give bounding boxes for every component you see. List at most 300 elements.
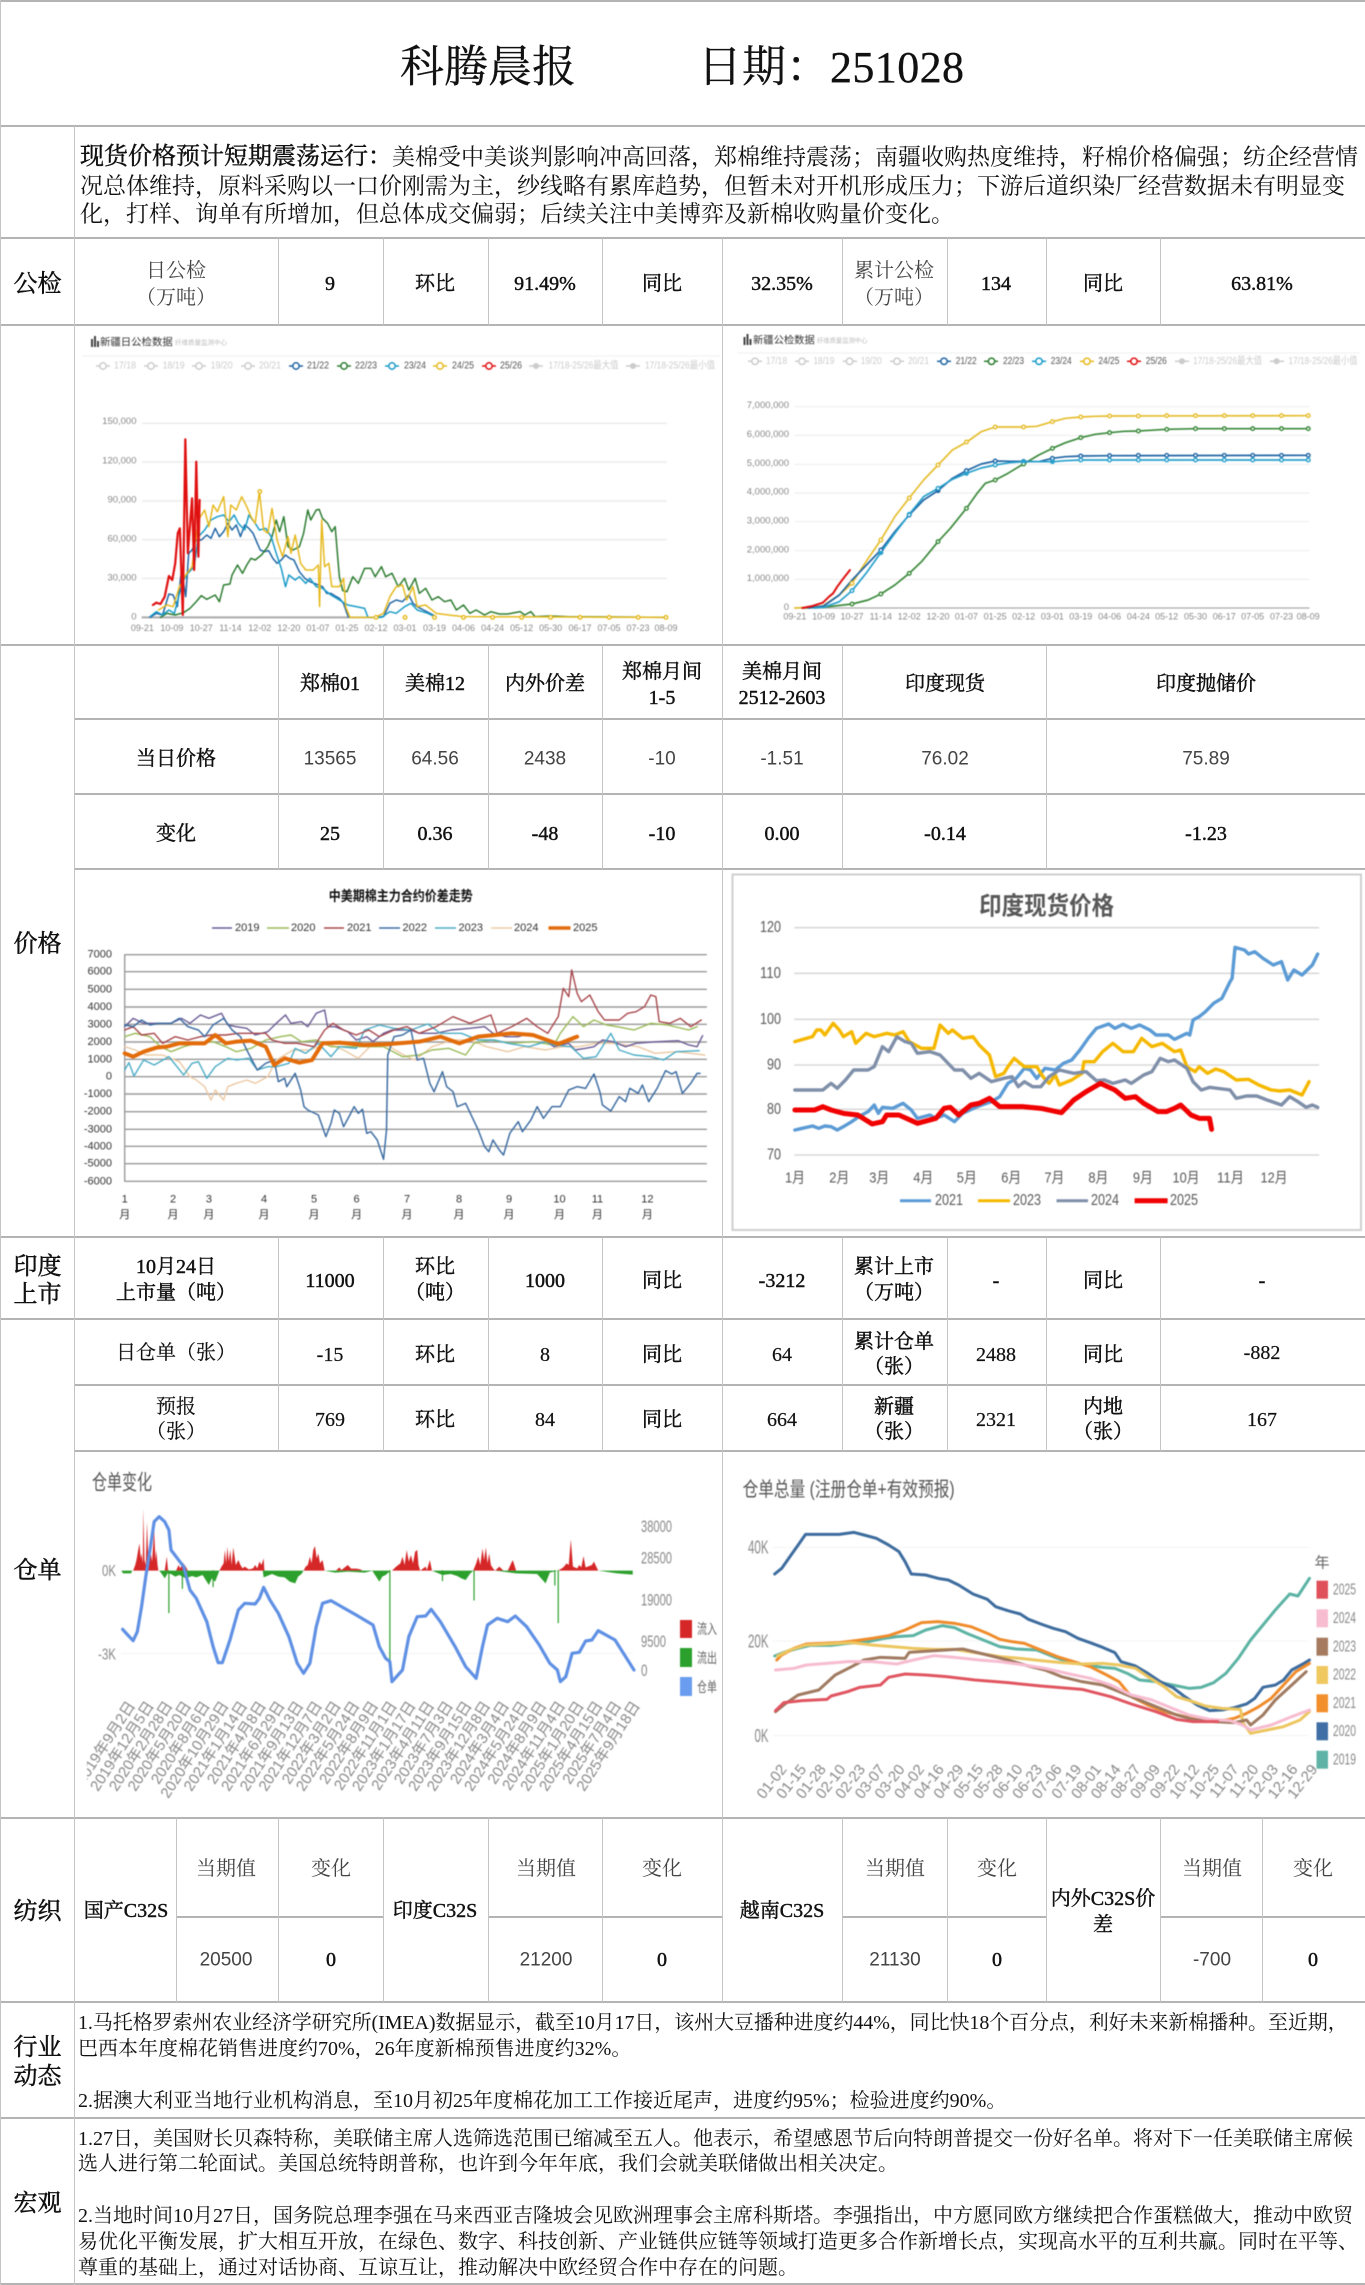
- chart 4 axes: 70: [767, 1146, 781, 1164]
- chart 4 axes: 2月: [829, 1170, 849, 1186]
- chart 4 legend: 2021: [935, 1192, 963, 1209]
- chart 5 date labels: 2024年3月4日: [447, 1698, 513, 1787]
- chart 3 axes: -6000: [84, 1175, 112, 1187]
- chart 6 axes: 20K: [748, 1632, 768, 1652]
- chart 2 axes: 12-20: [926, 611, 950, 621]
- chart 3 axes: 7000: [88, 949, 112, 961]
- chart 5 date labels: 2025年4月15日: [536, 1698, 607, 1794]
- table: prices: 25: [320, 823, 340, 845]
- table: India arrivals: 同比: [642, 1269, 682, 1292]
- chart 3 legend: 2025: [573, 922, 597, 934]
- chart 1 axes: [102, 416, 678, 633]
- table: public inspection: [136, 259, 1293, 309]
- chart 6 axes: 03-20: [871, 1761, 908, 1802]
- chart 1 axes: 11-14: [219, 623, 242, 633]
- chart 6 axes: 09-09: [1127, 1761, 1164, 1802]
- chart 3 axes: 2000: [88, 1036, 112, 1048]
- table: warehouse receipts: 新疆: [874, 1395, 914, 1418]
- chart 2 lines: [795, 407, 1309, 608]
- table: warehouse receipts: （张）: [864, 1355, 924, 1378]
- chart 2 axes: 4,000,000: [747, 486, 789, 498]
- table: prices: 64.56: [411, 748, 459, 770]
- chart 2 axes: 07-05: [1241, 611, 1264, 621]
- chart 2 axes: 08-09: [1297, 611, 1320, 621]
- chart 3 axes: 5: [311, 1193, 317, 1205]
- chart 4 axes: 9月: [1133, 1170, 1153, 1186]
- title: [400, 42, 964, 92]
- chart 3 axes: [84, 949, 654, 1221]
- chart 5 date labels: 2023年4月11日: [368, 1698, 438, 1793]
- chart 6 axes: 08-27: [1107, 1761, 1144, 1802]
- chart 5 date labels: 2020年5月20日: [125, 1698, 195, 1794]
- chart: total warehouse receipts: [743, 1478, 1356, 1802]
- chart 6 axes: 05-15: [950, 1761, 987, 1802]
- chart 1 legend: 22/23: [355, 360, 377, 372]
- table: yarn prices: 越南C32S: [740, 1899, 824, 1922]
- chart 5 date labels: 2021年12月7日: [255, 1698, 326, 1794]
- section labels: 纺织: [14, 1898, 62, 1925]
- chart 2 legend: 21/22: [956, 356, 977, 367]
- chart 3 legend: 2021: [347, 922, 371, 934]
- chart 2 title: [744, 334, 868, 346]
- table: warehouse receipts: 664: [767, 1409, 797, 1431]
- chart 1 axes: 04-06: [452, 623, 475, 633]
- table: public inspection: 91.49%: [514, 273, 576, 295]
- chart 3 axes: 4000: [88, 1001, 112, 1013]
- chart 6 axes: 40K: [748, 1538, 768, 1558]
- table: yarn prices: 0: [992, 1949, 1002, 1971]
- chart 2 axes: 5,000,000: [747, 458, 789, 469]
- chart 6 axes: [748, 1538, 1321, 1802]
- chart 6 axes: 08-01: [1068, 1761, 1105, 1802]
- table: India arrivals: 11000: [305, 1270, 355, 1292]
- table: yarn prices: 21130: [869, 1950, 921, 1970]
- chart 6 axes: 12-16: [1265, 1761, 1302, 1802]
- chart 3 axes: -1000: [84, 1088, 112, 1100]
- chart 2 legend: 17/18: [766, 356, 787, 367]
- chart 3 axes: 10: [553, 1193, 566, 1205]
- table: India arrivals: 上市量（吨）: [116, 1281, 236, 1304]
- chart 6 axes: 04-29: [930, 1761, 967, 1802]
- table: warehouse receipts: 769: [315, 1409, 345, 1431]
- section labels: 公检: [14, 270, 62, 298]
- chart 5 axes: 9500: [641, 1632, 666, 1651]
- table: prices: -48: [532, 823, 558, 845]
- table: warehouse receipts: 内地: [1083, 1395, 1123, 1418]
- table: warehouse receipts: [116, 1330, 1280, 1443]
- chart 4 axes: 6月: [1001, 1170, 1021, 1186]
- table: prices: 郑棉月间: [622, 660, 702, 683]
- chart 3 axes: 月: [168, 1209, 178, 1221]
- table: India arrivals: -: [993, 1270, 999, 1292]
- chart 6 title: 仓单总量 (注册仓单+有效预报): [743, 1478, 955, 1501]
- chart 5 date labels: 2025年7月4日: [559, 1698, 625, 1787]
- text block: macro news: 2.当地时间10月27日，国务院总理李强在马来西亚吉隆坡会见欧洲理事会主席科斯塔。李强指出，中方愿同欧方继续把合作蛋糕做大，推动中欧贸: [78, 2204, 1354, 2227]
- chart 1 axes: 09-21: [131, 623, 154, 633]
- chart 3 axes: 月: [402, 1209, 412, 1221]
- chart 5 date labels: 2024年11月4日: [499, 1698, 569, 1793]
- chart 6 axes: 01-28: [793, 1761, 830, 1802]
- chart 2 legend: [748, 354, 1358, 367]
- chart 1 axes: 04-24: [481, 623, 504, 633]
- chart 3 axes: 月: [454, 1209, 464, 1221]
- chart: Xinjiang daily inspection: [82, 336, 720, 633]
- chart 3 axes: 4: [261, 1193, 267, 1205]
- table: warehouse receipts: -882: [1244, 1342, 1280, 1364]
- table: prices: 0.00: [764, 823, 800, 845]
- table: India arrivals: -3212: [759, 1270, 805, 1292]
- table: public inspection: （万吨）: [854, 286, 934, 309]
- table: prices: -10: [649, 823, 675, 845]
- chart 1 axes: 06-17: [568, 623, 592, 633]
- table: yarn prices: 变化: [311, 1857, 351, 1880]
- chart: China-US futures spread: [84, 888, 706, 1221]
- chart 5 axes: 38000: [641, 1517, 672, 1536]
- chart 2 axes: 0: [784, 602, 789, 613]
- table: India arrivals: （万吨）: [854, 1281, 934, 1304]
- chart 3 legend: 2023: [458, 922, 483, 934]
- table: warehouse receipts: 同比: [642, 1408, 682, 1431]
- table: India arrivals: 1000: [525, 1270, 565, 1292]
- chart 2 axes: 04-24: [1127, 611, 1150, 621]
- chart 2 axes: 01-25: [984, 611, 1007, 621]
- chart 2 axes: 10-27: [840, 611, 864, 621]
- chart 3 axes: 0: [106, 1071, 112, 1083]
- table: India arrivals: 同比: [1083, 1269, 1123, 1292]
- chart 6 legend: [1314, 1554, 1356, 1769]
- table: prices: 0.36: [418, 823, 452, 845]
- chart 2 axes: 02-12: [1012, 611, 1035, 621]
- chart 4 axes: 11月: [1217, 1170, 1244, 1186]
- chart 6 axes: 05-28: [970, 1761, 1007, 1802]
- chart 6 axes: 0K: [754, 1726, 768, 1746]
- chart 1 axes: 01-25: [335, 623, 358, 633]
- chart 4 title: 印度现货价格: [979, 893, 1114, 921]
- chart 1 axes: 10-09: [160, 623, 183, 633]
- chart 3 axes: -3000: [84, 1123, 112, 1135]
- table: prices: 印度现货: [905, 672, 987, 695]
- chart 4 axes: 7月: [1044, 1170, 1064, 1186]
- chart 3 legend: 2024: [514, 922, 538, 934]
- chart 5 legend: [680, 1620, 717, 1696]
- table: public inspection: 63.81%: [1231, 273, 1293, 295]
- chart 6 axes: 06-10: [989, 1761, 1026, 1802]
- chart 2 axes: 05-12: [1155, 611, 1178, 621]
- chart 5 date labels: 2022年8月9日: [316, 1698, 382, 1787]
- chart 1 axes: 01-07: [306, 623, 329, 633]
- chart 2 legend: 18/19: [813, 356, 835, 367]
- table: warehouse receipts: （张）: [864, 1420, 924, 1443]
- chart 1 legend: 18/19: [163, 360, 185, 372]
- chart 4 axes: 100: [760, 1011, 781, 1028]
- summary paragraph: 况总体维持，原料采购以一口价刚需为主，纱线略有累库趋势，但暂未对开机形成压力；下游后道织染厂经营数据未有明显变: [80, 174, 1345, 200]
- chart 6 axes: 01-02: [753, 1761, 790, 1802]
- section labels: 仓单: [14, 1557, 62, 1584]
- chart 2 axes: 6,000,000: [747, 429, 789, 440]
- table: yarn prices: 差: [1093, 1913, 1113, 1936]
- chart 2 axes: 11-14: [870, 611, 892, 621]
- table: prices: 当日价格: [136, 747, 216, 770]
- chart 3 axes: -2000: [84, 1106, 112, 1118]
- chart 2 axes: 05-30: [1184, 611, 1207, 621]
- chart 4 axes: 110: [760, 965, 781, 982]
- chart 1 title: 纤维质量监测中心: [175, 338, 228, 346]
- table: warehouse receipts: 环比: [415, 1408, 455, 1431]
- table: yarn prices: 当期值: [516, 1857, 576, 1880]
- text block: macro news: 尊重的基础上，通过对话协商、互谅互让，推动解决中欧经贸合作中存在的问题。: [78, 2256, 798, 2279]
- chart 2 legend: 23/24: [1051, 356, 1072, 367]
- table: yarn prices: -700: [1193, 1950, 1231, 1970]
- text block: industry news: 1.马托格罗索州农业经济学研究所(IMEA)数据显示，截至10月17日，该州大豆播种进度约44%，同比快18个百分点，利好未来新棉播种。至近期，: [78, 2011, 1348, 2034]
- chart 1 axes: 08-09: [654, 623, 678, 633]
- chart 4 lines: [795, 928, 1319, 1155]
- chart 6 axes: 10-25: [1186, 1761, 1223, 1802]
- chart 4 axes: 120: [760, 919, 781, 936]
- table: yarn prices: 当期值: [865, 1857, 925, 1880]
- chart 6 axes: 10-12: [1166, 1761, 1203, 1802]
- chart 4 axes: 10月: [1172, 1170, 1200, 1186]
- text block: macro news: 1.27日，美国财长贝森特称，美联储主席人选筛选范围已缩减至五人。他表示，希望感恩节后向特朗普提交一份好名单。将对下一任美联储主席候: [78, 2127, 1353, 2150]
- chart 6 axes: 07-06: [1029, 1761, 1066, 1802]
- chart 2 legend: 20/21: [908, 356, 929, 367]
- chart 2 axes: 06-17: [1213, 611, 1236, 621]
- chart 5 date labels: 2024年5月24日: [461, 1698, 532, 1794]
- chart 1 axes: 10-27: [190, 623, 213, 633]
- summary paragraph: 现货价格预计短期震荡运行：美棉受中美谈判影响冲高回落，郑棉维持震荡；南疆收购热度维持，籽棉价格偏强；纺企经营情: [80, 143, 1358, 170]
- title: 日期：251028: [698, 42, 964, 92]
- table: prices: 内外价差: [505, 672, 585, 695]
- section labels: 价格: [14, 930, 62, 958]
- chart 5 date labels: 2022年3月2日: [279, 1698, 345, 1787]
- table: public inspection: 环比: [415, 272, 455, 295]
- table: warehouse receipts: 累计仓单: [854, 1330, 934, 1353]
- table: prices: 75.89: [1182, 748, 1230, 770]
- table: prices: 76.02: [921, 748, 969, 770]
- chart 3 axes: 1000: [88, 1053, 112, 1065]
- chart 3 axes: 月: [504, 1209, 514, 1221]
- table: yarn prices: 变化: [1293, 1857, 1333, 1880]
- chart 4 legend: 2024: [1091, 1192, 1119, 1209]
- section labels: 上市: [14, 1281, 62, 1308]
- chart 1 axes: 03-19: [423, 623, 446, 633]
- chart 5 date labels: 2022年11月1日: [331, 1698, 401, 1793]
- chart 2 axes: 07-23: [1270, 611, 1293, 621]
- text block: industry news: [78, 2011, 1348, 2112]
- chart 5 title: 仓单变化: [92, 1472, 152, 1494]
- chart 2 axes: 12-02: [898, 611, 921, 621]
- chart 2 legend: 19/20: [861, 356, 882, 367]
- chart 2 axes: 04-06: [1098, 611, 1121, 621]
- chart 5 axes: -3K: [98, 1646, 116, 1664]
- table: yarn prices: 变化: [977, 1857, 1017, 1880]
- chart 1 title: [91, 336, 228, 348]
- chart 2 title: 新疆公检数据: [753, 334, 815, 346]
- chart 1 axes: 12-02: [248, 623, 271, 633]
- table: yarn prices: 国产C32S: [84, 1899, 168, 1922]
- table: yarn prices: 20500: [200, 1950, 252, 1970]
- chart 2 axes: 3,000,000: [747, 516, 789, 526]
- chart 1 axes: 05-30: [539, 623, 562, 633]
- table: warehouse receipts: （张）: [146, 1420, 206, 1443]
- chart 6 lines: [773, 1532, 1309, 1736]
- chart 2 legend: 24/25: [1098, 356, 1120, 367]
- chart 6 axes: 11-20: [1226, 1761, 1262, 1801]
- chart 1 axes: 07-23: [626, 623, 650, 633]
- table: warehouse receipts: 8: [540, 1344, 550, 1366]
- chart 1 axes: 03-01: [393, 623, 417, 633]
- chart 2 axes: 7,000,000: [747, 400, 789, 411]
- chart 5 axes: [98, 1517, 672, 1680]
- chart 1 legend: 25/26: [500, 360, 522, 372]
- chart 4 legend: [900, 1192, 1198, 1209]
- chart 1 legend: 19/20: [211, 360, 233, 372]
- chart 6 axes: 02-10: [812, 1761, 849, 1802]
- table: public inspection: 9: [325, 273, 335, 295]
- chart 5 date labels: 2025年9月18日: [573, 1698, 644, 1794]
- chart 3 axes: 2: [170, 1193, 176, 1205]
- chart 2 legend: 17/18-25/26最大值: [1193, 354, 1262, 367]
- chart 2 axes: 03-19: [1069, 611, 1092, 621]
- chart 1 legend: 20/21: [259, 360, 281, 372]
- chart 2 legend: 22/23: [1003, 356, 1024, 367]
- chart 5 date labels: 2024年8月9日: [484, 1698, 550, 1787]
- table: yarn prices: 当期值: [1182, 1857, 1242, 1880]
- chart 2 axes: 1,000,000: [747, 573, 789, 584]
- chart 6 axes: 03-07: [852, 1761, 889, 1802]
- table: yarn prices: [84, 1857, 1333, 1971]
- chart 6 axes: 04-02: [891, 1761, 928, 1802]
- section labels: 行业: [14, 2034, 62, 2061]
- chart 3 axes: 7: [404, 1193, 410, 1205]
- chart: Xinjiang cumulative inspection: [737, 334, 1360, 621]
- chart 4 axes: 3月: [869, 1170, 889, 1186]
- table: prices: [136, 660, 1256, 845]
- text block: industry news: 巴西本年度棉花销售进度约70%，26年度新棉预售进度约32%。: [78, 2037, 631, 2060]
- chart 1 axes: 02-12: [364, 623, 388, 633]
- chart 5 axes: 19000: [641, 1590, 672, 1610]
- chart 5 date labels: 2020年8月6日: [148, 1698, 214, 1787]
- table: prices: -1.23: [1185, 823, 1227, 845]
- chart 4 axes: 12月: [1260, 1170, 1288, 1186]
- table: prices: 2438: [524, 748, 566, 770]
- chart 1 legend: 24/25: [452, 360, 474, 372]
- chart 4 legend: 2023: [1013, 1192, 1041, 1209]
- chart 1 axes: 0: [131, 612, 136, 622]
- chart 2 axes: 03-01: [1041, 611, 1064, 621]
- table: public inspection: 同比: [642, 272, 682, 295]
- table: prices: -10: [648, 748, 676, 770]
- table: public inspection: 日公检: [146, 259, 206, 282]
- table: public inspection: （万吨）: [136, 286, 216, 309]
- table: warehouse receipts: （张）: [1073, 1420, 1133, 1443]
- chart 4 axes: 1月: [785, 1170, 805, 1186]
- table: prices: -1.51: [760, 748, 804, 770]
- chart 5 axes: 0K: [102, 1563, 116, 1580]
- chart 6 axes: 04-16: [911, 1761, 948, 1802]
- chart 1 lines: [142, 423, 666, 617]
- table: warehouse receipts: -15: [317, 1344, 343, 1366]
- table: warehouse receipts: 同比: [642, 1343, 682, 1366]
- chart 5 date labels: 2023年1月17日: [349, 1698, 420, 1794]
- table: warehouse receipts: 预报: [156, 1395, 196, 1418]
- chart 5 legend: 流入: [697, 1621, 717, 1637]
- chart 3 legend: [212, 922, 597, 934]
- table: prices: 美棉月间: [742, 660, 822, 683]
- chart 5 date labels: 2023年12月8日: [424, 1698, 494, 1794]
- table: yarn prices: 内外C32S价: [1051, 1887, 1155, 1910]
- table: yarn prices: 0: [326, 1949, 336, 1971]
- chart 5 date labels: 2023年9月15日: [405, 1698, 476, 1794]
- chart 4 axes: 80: [767, 1101, 781, 1118]
- chart 5 legend: 仓单: [697, 1679, 717, 1695]
- chart 6 axes: 12-03: [1245, 1761, 1282, 1802]
- chart 3 axes: 月: [119, 1209, 130, 1221]
- chart 1 legend: 17/18-25/26最大值: [548, 358, 618, 372]
- table: warehouse receipts: 环比: [415, 1343, 455, 1366]
- table: prices: 13565: [304, 748, 356, 770]
- table: India arrivals: [116, 1255, 1265, 1304]
- table: public inspection: 134: [981, 273, 1011, 295]
- summary paragraph: [80, 143, 1358, 228]
- table: yarn prices: 当期值: [196, 1857, 256, 1880]
- chart 1 legend: 17/18: [114, 360, 136, 372]
- text block: macro news: 选人进行第二轮面试。美国总统特朗普称，也许到今年年底，我们会就美联储做出相关决定。: [78, 2152, 898, 2175]
- chart 5 bars and line: [121, 1508, 634, 1682]
- text block: macro news: 易优化平衡发展，扩大相互开放，在绿色、数字、科技创新、产业链供应链等领域打造更多合作新增长点，实现高水平的互利共赢。同时在平等、: [78, 2230, 1358, 2253]
- chart 4 axes: 90: [767, 1056, 781, 1074]
- table: yarn prices: 0: [657, 1949, 667, 1971]
- chart 4 legend: 2025: [1170, 1192, 1198, 1209]
- chart 6 axes: 11-07: [1206, 1761, 1243, 1801]
- chart 3 axes: 月: [308, 1209, 320, 1221]
- chart 5 axes: 0: [641, 1661, 648, 1680]
- chart: India spot prices: [732, 874, 1361, 1230]
- chart 1 axes: 12-20: [277, 623, 300, 633]
- table: warehouse receipts: 2488: [976, 1344, 1016, 1366]
- chart 5 date labels: [73, 1698, 644, 1801]
- chart 5 date labels: 2021年4月8日: [204, 1698, 270, 1787]
- text block: industry news: 2.据澳大利亚当地行业机构消息，至10月初25年度棉花加工工作接近尾声，进度约95%；检验进度约90%。: [78, 2089, 1006, 2112]
- chart 5 date labels: 2019年9月2日: [73, 1698, 139, 1787]
- table: yarn prices: 0: [1308, 1949, 1318, 1971]
- chart 5 axes: 28500: [641, 1548, 672, 1568]
- table: prices: 1-5: [649, 687, 675, 709]
- table: yarn prices: 21200: [520, 1950, 572, 1970]
- chart 3 legend: 2022: [402, 922, 427, 934]
- chart 1 axes: 150,000: [102, 416, 136, 427]
- chart 3 axes: 1: [122, 1193, 128, 1205]
- chart 1 axes: 30,000: [107, 572, 136, 584]
- chart 3 axes: 月: [592, 1209, 603, 1221]
- chart 3 lines: [125, 955, 706, 1181]
- chart 4 axes: 4月: [913, 1170, 933, 1186]
- chart 3 axes: 月: [642, 1209, 653, 1221]
- chart 6 legend: 年: [1314, 1554, 1330, 1572]
- table: warehouse receipts: 84: [535, 1409, 555, 1431]
- table: prices: 美棉12: [405, 672, 465, 695]
- table: India arrivals: -: [1259, 1270, 1265, 1292]
- chart 1 title: 新疆日公检数据: [100, 336, 173, 348]
- chart 3 axes: 5000: [88, 983, 112, 995]
- chart 2 axes: 10-09: [812, 611, 835, 621]
- chart 1 axes: 60,000: [107, 534, 136, 544]
- text block: macro news: [78, 2127, 1358, 2279]
- chart 3 axes: -5000: [84, 1158, 112, 1170]
- table: warehouse receipts: 2321: [976, 1409, 1016, 1431]
- table: prices: -0.14: [924, 823, 966, 845]
- chart 5 date labels: 2025年1月20日: [517, 1698, 588, 1794]
- table: prices: 郑棉01: [300, 672, 360, 695]
